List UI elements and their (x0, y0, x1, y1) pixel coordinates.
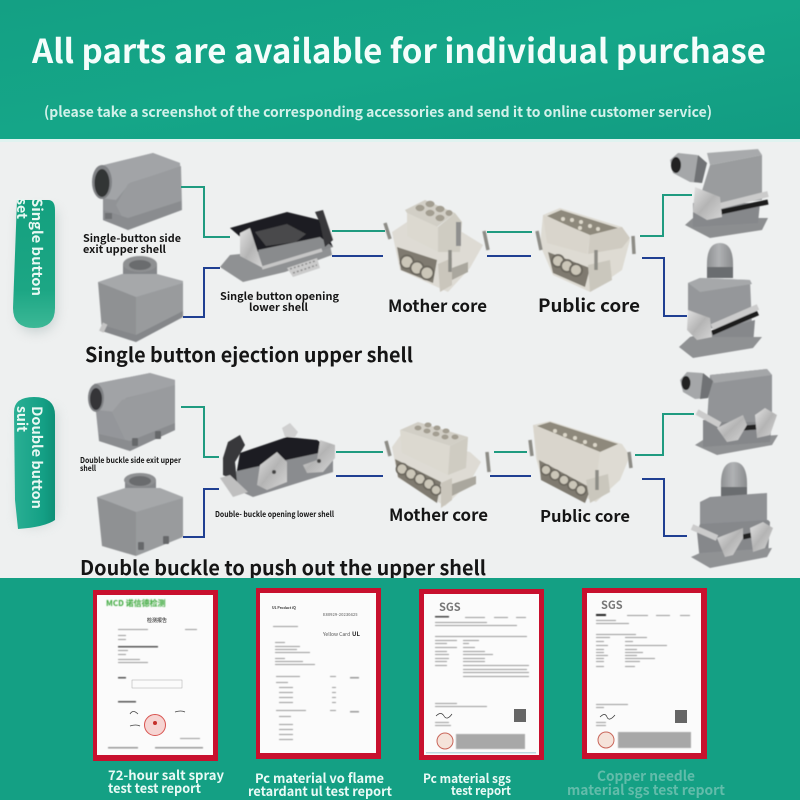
connectors: double mother core to public core (490, 452, 531, 476)
label: single button lower shell: Single button opening (220, 289, 340, 304)
panel: test reports (0, 578, 800, 800)
product: double top exit upper shell (97, 473, 183, 556)
label: single button section heading: Single button ejection upper shell (85, 339, 413, 368)
product: mother core (385, 200, 488, 292)
product: assembled double side exit shell (680, 369, 778, 455)
label: double side exit upper shell: Double buckle side exit upper (80, 455, 181, 466)
report: UL flame (256, 588, 381, 759)
caption: UL flame: Pc material vo flame (255, 768, 384, 787)
report: PC material SGS: SGS (439, 599, 461, 615)
product: single button lower shell (220, 210, 333, 282)
label: mother core: Mother core (388, 292, 487, 317)
product: assembled side exit shell (670, 149, 768, 238)
caption: copper needle SGS: Copper needle (597, 766, 695, 786)
caption: copper needle SGS: material sgs test report (567, 780, 725, 800)
side tab: double button suit (12, 397, 56, 529)
report: UL flame: UL (352, 629, 360, 638)
product: assembled double top exit shell (691, 462, 773, 568)
caption: salt spray: 72-hour salt spray (108, 765, 225, 784)
subtitle: (please take a screenshot of the corresponding accessories and send it to online customer service) (44, 101, 712, 122)
connectors: mother core to public core (487, 232, 532, 256)
report: copper needle SGS: SGS (601, 597, 623, 613)
side tab: single button set: Single button (27, 198, 47, 296)
panel: single button set (12, 149, 768, 368)
label: double public core: Public core (540, 503, 630, 527)
report: copper needle SGS (582, 588, 707, 759)
product: double buckle lower shell (220, 423, 335, 497)
caption: PC material SGS: Pc material sgs (423, 768, 511, 787)
connectors: lower shell to mother core (332, 231, 385, 256)
side tab: single button set: set (12, 198, 32, 219)
label: side exit upper shell: Single-button side (83, 231, 181, 246)
label: public core: Public core (538, 292, 640, 318)
product: side exit upper shell (92, 153, 182, 230)
side tab: double button suit: suit (12, 406, 32, 432)
connectors: upper shells to lower shell (181, 187, 230, 317)
caption: salt spray: test test report (108, 778, 202, 797)
label: side exit upper shell (83, 231, 181, 257)
captions: report names (108, 765, 725, 800)
caption: PC material SGS (423, 768, 512, 799)
label: double mother core: Mother core (389, 501, 488, 526)
label: side exit upper shell: exit upper shell (83, 242, 167, 257)
panel: header banner (0, 0, 800, 142)
label: double buckle section heading: Double buckle to push out the upper shell (80, 552, 486, 581)
report: UL flame: E80929-20230425 (323, 612, 358, 618)
report: salt spray: MCD 诺信德检测 (106, 598, 166, 609)
label: double buckle lower shell: Double- buckle opening lower shell (215, 509, 334, 520)
side tab: double button suit: Double button (27, 406, 47, 509)
product: double public core (530, 421, 631, 503)
report: salt spray (93, 590, 218, 761)
label: double side exit upper shell (80, 455, 181, 474)
report: UL flame: Yellow Card (322, 631, 350, 638)
label: single button lower shell (220, 289, 340, 315)
product: top exit upper shell (98, 256, 183, 342)
caption: copper needle SGS (567, 766, 725, 800)
product: double side exit upper shell (88, 373, 175, 451)
product: double mother core (386, 422, 489, 508)
connectors: double lower shell to mother core (336, 452, 383, 476)
label: double side exit upper shell: shell (80, 463, 96, 474)
connectors: public core to assembled shells (640, 195, 692, 316)
connectors: double upper shells to lower shell (181, 407, 219, 537)
panel: double button suit (12, 369, 778, 581)
caption: PC material SGS: test report (451, 780, 512, 799)
title: All parts are available for individual purchase (31, 25, 766, 73)
side tab: single button set (12, 198, 56, 332)
caption: UL flame: retardant ul test report (248, 781, 393, 800)
caption: salt spray (108, 765, 225, 797)
product: public core (537, 208, 634, 292)
product: assembled top exit shell (679, 243, 762, 358)
label: single button lower shell: lower shell (249, 300, 309, 315)
connectors: double public core to assembled shells (635, 414, 694, 536)
report: PC material SGS (419, 589, 544, 760)
report: salt spray: 检测报告 (147, 617, 167, 624)
caption: UL flame (248, 768, 393, 800)
report: UL flame: UL Product iQ (272, 606, 296, 611)
